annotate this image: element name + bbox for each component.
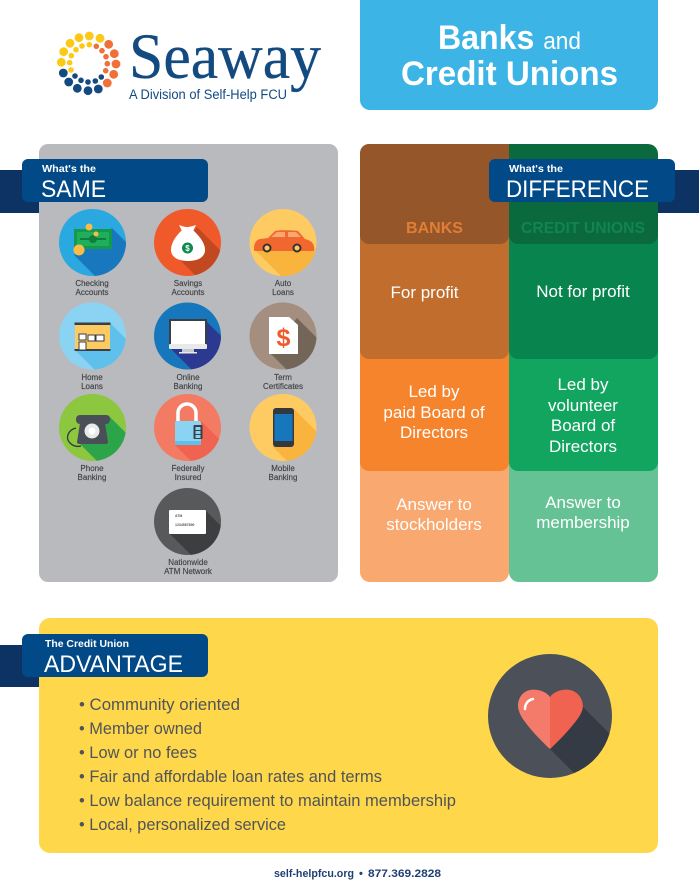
label: Home: [81, 373, 103, 382]
row: board: Directors: [549, 437, 617, 456]
heading tab: advantage: ADVANTAGE: [44, 651, 183, 678]
advantages list: • Member owned: [79, 719, 202, 738]
label: Certificates: [263, 382, 303, 391]
label: Loans: [272, 288, 294, 297]
label: ATM Network: [164, 567, 213, 576]
heading tab: same: [22, 159, 208, 203]
row: board: paid Board of: [383, 403, 485, 422]
icon: term certificates: [250, 302, 316, 370]
label: Accounts: [172, 288, 204, 297]
row: board: Board of: [551, 416, 615, 435]
logo: Seaway: [57, 21, 321, 102]
icon: home loans: [59, 302, 126, 370]
label: Nationwide: [168, 558, 208, 567]
icon: mobile banking: [250, 394, 316, 461]
label: Federally: [172, 464, 204, 473]
icon: savings accounts: $: [185, 244, 190, 253]
ribbon band: [0, 645, 39, 687]
panel: credit union advantage: [0, 618, 658, 853]
footer contact: [274, 868, 441, 880]
label: Banking: [78, 473, 106, 482]
title panel: [360, 0, 658, 110]
row: owners: membership: [536, 513, 630, 532]
icon: atm network: ATM: [175, 514, 182, 518]
icon: sun of dots: [57, 32, 120, 95]
ribbon band: [658, 170, 699, 213]
row: board: Led by: [557, 375, 609, 394]
icon: checking accounts: [59, 209, 126, 276]
label: Insured: [175, 473, 201, 482]
heading tab: difference: DIFFERENCE: [506, 176, 649, 203]
panel: what's the same: [0, 144, 338, 582]
ribbon band: [0, 170, 39, 213]
label: Mobile: [271, 464, 295, 473]
label: Phone: [80, 464, 104, 473]
column heading: credit unions: CREDIT UNIONS: [521, 220, 645, 237]
footer contact: self-helpfcu.org: [274, 868, 354, 880]
label: Online: [176, 373, 200, 382]
label: Banking: [174, 382, 202, 391]
row: owners: Answer to: [545, 493, 621, 512]
column heading: banks: BANKS: [406, 220, 463, 237]
label: Checking: [75, 279, 109, 288]
icon: federally insured: [154, 394, 221, 461]
advantages list: • Fair and affordable loan rates and terms: [79, 767, 382, 786]
footer contact: •: [359, 868, 363, 880]
row: not for profit: Not for profit: [536, 282, 630, 301]
icon: atm network: [154, 488, 221, 555]
tagline: A Division of Self-Help FCU: [129, 87, 287, 102]
heading tab: same: What's the: [42, 163, 96, 175]
label: Accounts: [76, 288, 108, 297]
advantages list: • Local, personalized service: [79, 815, 286, 834]
panel: what's the difference: [360, 144, 699, 582]
label: Term: [274, 373, 292, 382]
row: owners: stockholders: [386, 515, 482, 534]
heading tab: difference: [489, 159, 675, 203]
heading tab: advantage: [22, 634, 208, 678]
advantages list: • Community oriented: [79, 695, 240, 714]
label: Auto: [275, 279, 292, 288]
title panel: Credit Unions: [401, 55, 618, 93]
row: for profit: For profit: [390, 283, 459, 302]
icon: heart: [488, 654, 612, 778]
advantages list: • Low balance requirement to maintain membership: [79, 791, 456, 810]
advantages list: • Low or no fees: [79, 743, 197, 762]
footer contact: 877.369.2828: [368, 868, 441, 880]
label: Loans: [81, 382, 103, 391]
icon: atm network: 1234567890: [175, 523, 195, 527]
heading tab: difference: What's the: [509, 163, 563, 175]
row: owners: Answer to: [396, 495, 472, 514]
column: banks: [360, 144, 509, 582]
heading tab: same: SAME: [41, 176, 106, 203]
icon: savings accounts: [154, 209, 221, 276]
title: Banks and: [438, 19, 581, 57]
column: credit unions: [509, 144, 658, 582]
heading tab: advantage: The Credit Union: [45, 638, 129, 650]
icon: online banking: [154, 302, 221, 370]
icon: auto loans: [250, 209, 316, 276]
wordmark: Seaway: [129, 21, 321, 93]
advantages list: [79, 695, 456, 834]
label: Savings: [174, 279, 202, 288]
icon: phone banking: [59, 394, 126, 461]
label: Banking: [269, 473, 297, 482]
icon: term certificates: $: [277, 324, 291, 352]
row: board: volunteer: [548, 396, 618, 415]
row: board: Directors: [400, 423, 468, 442]
row: board: Led by: [408, 382, 460, 401]
